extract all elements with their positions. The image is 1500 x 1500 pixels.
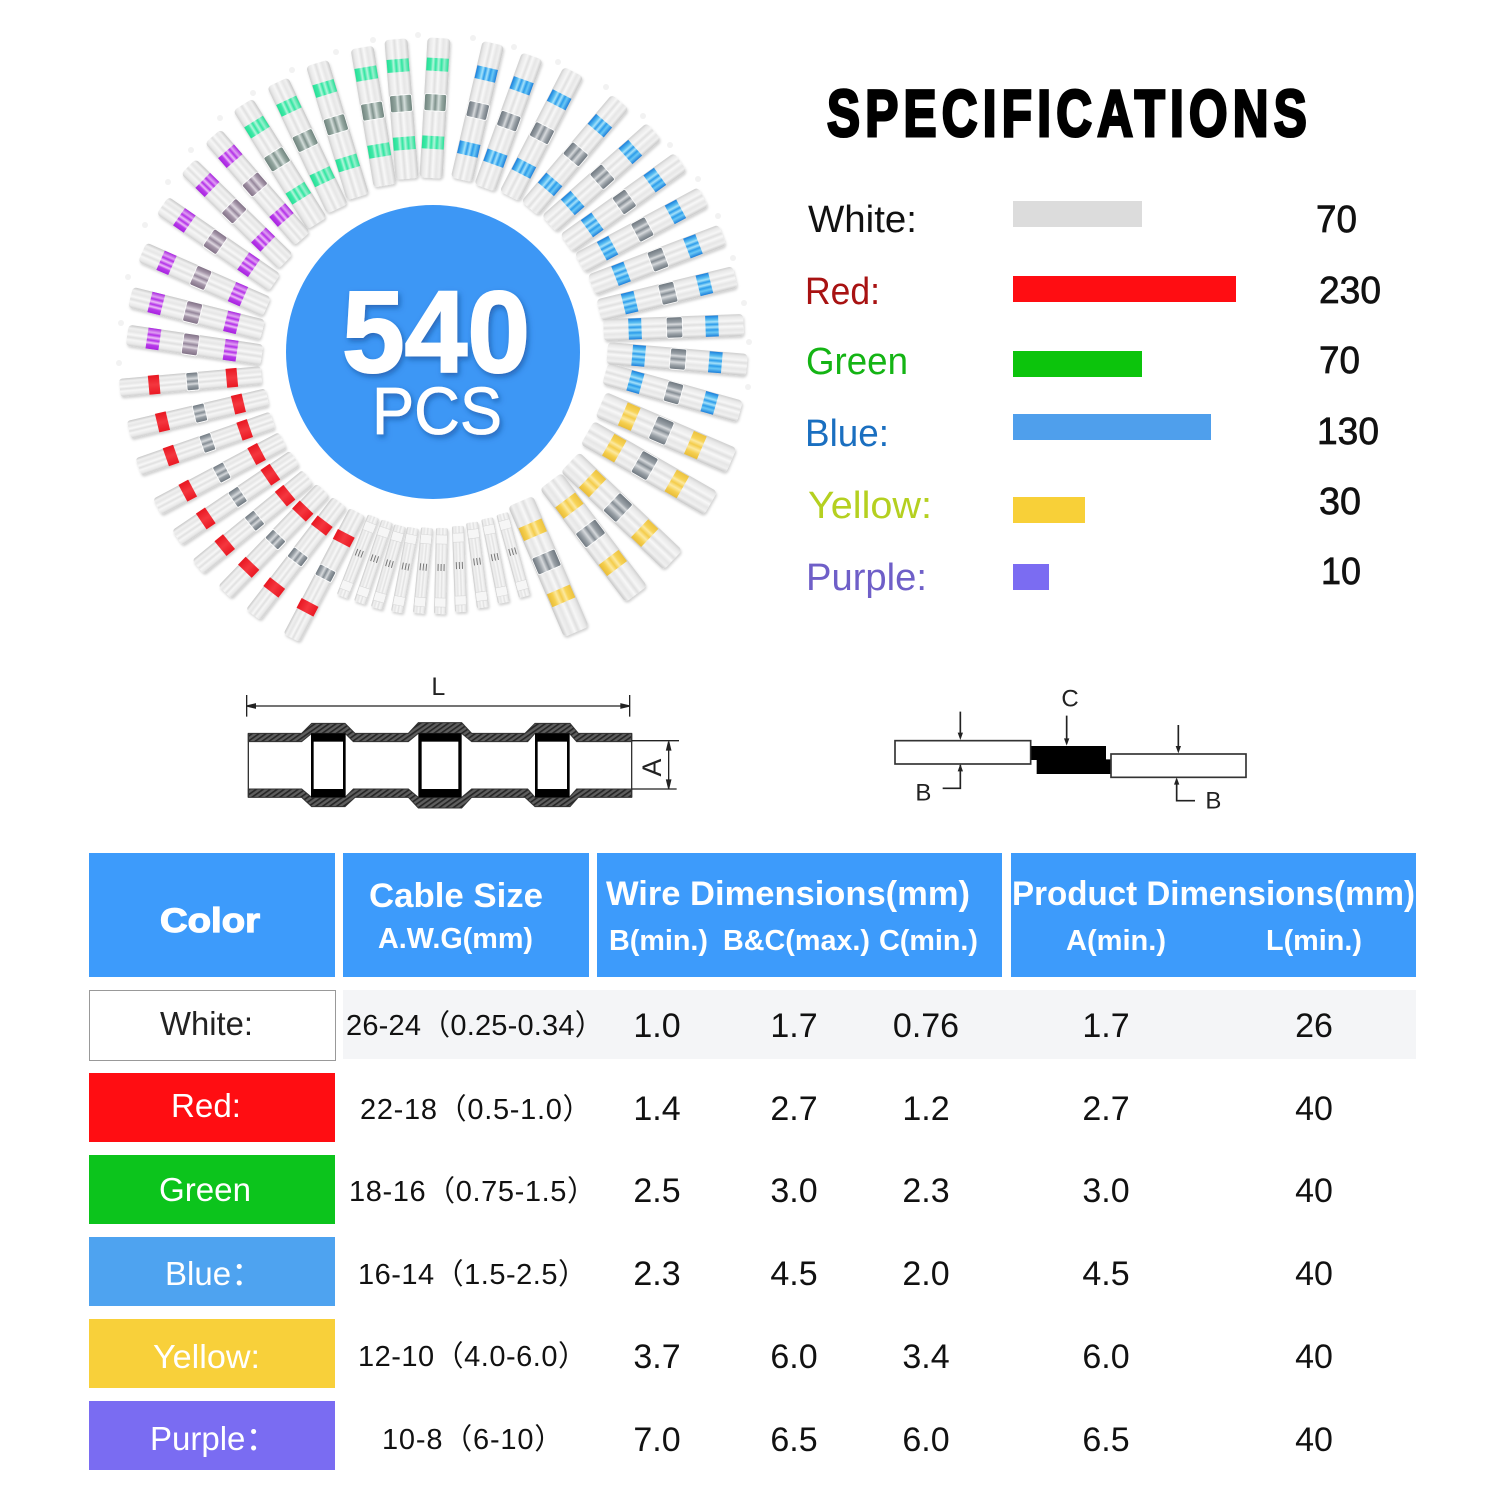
table row: blue: Blue： <box>165 1255 264 1292</box>
table row: green: 2.5 <box>633 1172 681 1210</box>
header: wire dimensions: C(min.) <box>879 925 978 957</box>
table row: green: Green <box>159 1171 251 1208</box>
L label: L <box>431 673 445 701</box>
table row: yellow: 3.4 <box>902 1338 950 1376</box>
diagram: connector cross-section with L and A dimensions <box>247 673 679 808</box>
quantity bar chart <box>805 199 1381 599</box>
table row: purple: 7.0 <box>633 1421 681 1459</box>
radial ring of solder connector tubes <box>116 32 752 642</box>
C label: C <box>1061 686 1079 713</box>
header: wire dimensions: B&C(max.) <box>723 925 870 957</box>
table row: purple: 40 <box>1295 1421 1333 1459</box>
row: blue: Blue: <box>805 413 889 455</box>
row: green <box>806 340 1360 383</box>
bottom wall <box>248 789 632 808</box>
header: cable size: Cable Size <box>369 877 543 915</box>
header: wire dimensions: Wire Dimensions(mm) <box>606 875 970 913</box>
faint dots around ring <box>116 32 752 390</box>
header: product dimensions <box>1011 853 1416 977</box>
table row: yellow: 3.7 <box>633 1338 681 1376</box>
table row: white: 26 <box>1295 1007 1333 1045</box>
header: product dimensions: L(min.) <box>1266 925 1362 957</box>
row: white: White: <box>808 199 917 241</box>
table row: blue: 4.5 <box>770 1255 818 1293</box>
table row: white: White: <box>160 1005 253 1042</box>
row: purple: 10 <box>1321 551 1361 593</box>
A dimension line <box>632 741 679 789</box>
header: cable size <box>343 853 589 977</box>
diagram: wire splice with B and C dimensions <box>895 686 1246 815</box>
table row: white: 1.7 <box>770 1007 818 1045</box>
purple tubes <box>126 129 310 365</box>
row: green: 70 <box>1319 340 1360 382</box>
left wire <box>895 741 1031 764</box>
table row: yellow: 6.0 <box>1082 1338 1130 1376</box>
tube end lines <box>248 733 632 797</box>
table row: purple <box>89 1401 1333 1470</box>
table row: blue: 2.0 <box>902 1255 950 1293</box>
table row: blue: 2.3 <box>633 1255 681 1293</box>
table row: white: 1.0 <box>633 1007 681 1045</box>
table row: white: 0.76 <box>893 1007 959 1045</box>
table row: white <box>90 990 1416 1060</box>
white tubes <box>337 512 531 614</box>
row: white <box>808 199 1357 241</box>
row: white: 70 <box>1316 199 1357 241</box>
header: color: Color <box>160 902 260 940</box>
header: color <box>89 853 335 977</box>
red tubes <box>119 366 366 642</box>
header: cable size: A.W.G(mm) <box>378 923 533 955</box>
center badge: 540 PCS <box>286 205 580 499</box>
table row: red: 22-18（0.5-1.0） <box>360 1094 592 1126</box>
solder rings <box>311 733 570 797</box>
table row: blue <box>89 1237 1333 1306</box>
table row: red <box>89 1073 1333 1142</box>
table row: yellow: 6.0 <box>770 1338 818 1376</box>
table row: red: 40 <box>1295 1090 1333 1128</box>
black solder joint <box>1031 746 1110 774</box>
header: product dimensions: Product Dimensions(mm) <box>1012 875 1415 913</box>
right wire <box>1111 754 1246 777</box>
table row: red: 1.2 <box>902 1090 950 1128</box>
table row: yellow: 12-10（4.0-6.0） <box>358 1341 587 1373</box>
row: red <box>805 270 1381 313</box>
row: yellow: Yellow: <box>808 485 932 527</box>
table row: red: Red: <box>171 1087 241 1124</box>
table row: blue: 16-14（1.5-2.5） <box>358 1259 587 1291</box>
table row: green <box>89 1155 1333 1224</box>
table row: white: 1.7 <box>1082 1007 1130 1045</box>
arrows <box>943 712 1195 801</box>
table row: yellow: 40 <box>1295 1338 1333 1376</box>
row: blue <box>805 411 1379 455</box>
table row: red: 1.4 <box>633 1090 681 1128</box>
green tubes <box>233 37 451 229</box>
header: wire dimensions <box>597 853 1002 977</box>
table row: red: 2.7 <box>1082 1090 1130 1128</box>
table row: purple: 6.5 <box>1082 1421 1130 1459</box>
row: yellow <box>808 481 1361 527</box>
table row: purple: Purple： <box>150 1420 278 1457</box>
header: wire dimensions: B(min.) <box>609 925 708 957</box>
table row: white: 26-24（0.25-0.34） <box>346 1010 604 1042</box>
table row: yellow <box>89 1319 1333 1388</box>
blue tubes <box>451 41 748 422</box>
table row: purple: 10-8（6-10） <box>382 1424 564 1456</box>
specification table <box>89 853 1416 1470</box>
row: purple: Purple: <box>806 557 927 599</box>
A label: A <box>637 759 667 777</box>
L dimension line <box>247 695 630 717</box>
yellow tubes <box>508 392 737 637</box>
title: specifications: SPECIFICATIONS <box>827 77 1312 151</box>
top wall <box>248 723 632 742</box>
row: purple <box>806 551 1361 599</box>
row: blue: 130 <box>1317 411 1379 453</box>
row: yellow: 30 <box>1319 481 1361 523</box>
table row: green: 40 <box>1295 1172 1333 1210</box>
table row: green: 2.3 <box>902 1172 950 1210</box>
table row: purple: 6.0 <box>902 1421 950 1459</box>
table row: green: 18-16（0.75-1.5） <box>349 1176 597 1208</box>
row: red: 230 <box>1319 270 1381 312</box>
table row: green: 3.0 <box>770 1172 818 1210</box>
header: product dimensions: A(min.) <box>1066 925 1166 957</box>
badge number: 540 <box>342 267 530 397</box>
left B label: B <box>915 780 931 807</box>
table row: blue: 4.5 <box>1082 1255 1130 1293</box>
right B label: B <box>1205 788 1221 815</box>
row: green: Green <box>806 341 908 383</box>
table row: blue: 40 <box>1295 1255 1333 1293</box>
table row: yellow: Yellow: <box>153 1338 260 1375</box>
badge unit: PCS <box>372 374 502 449</box>
table row: purple: 6.5 <box>770 1421 818 1459</box>
table row: green: 3.0 <box>1082 1172 1130 1210</box>
row: red: Red: <box>805 271 880 313</box>
table row: red: 2.7 <box>770 1090 818 1128</box>
